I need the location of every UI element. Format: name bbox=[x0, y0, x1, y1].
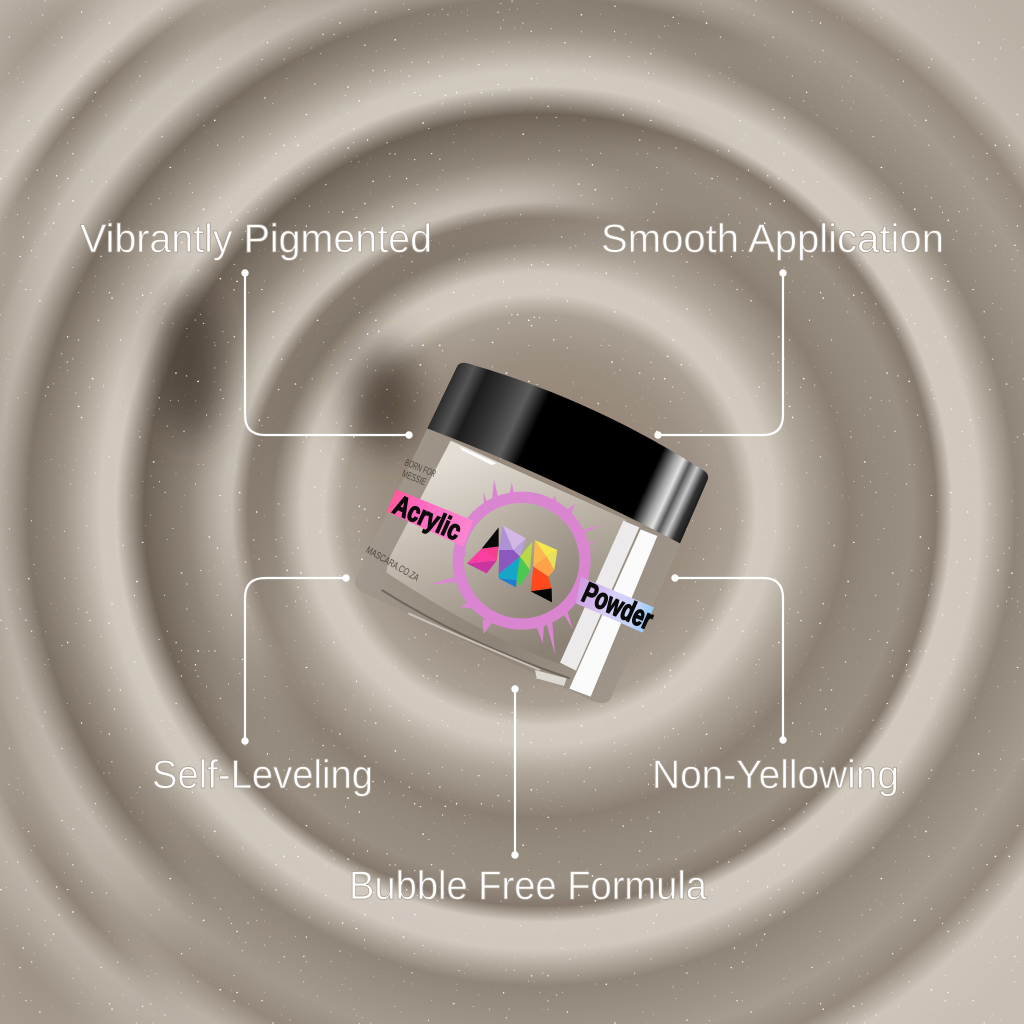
black lid bbox=[427, 363, 708, 543]
callout line: Non-Yellowing bbox=[672, 575, 786, 743]
callout line: Self-Leveling bbox=[242, 575, 349, 744]
callout line: Vibrantly Pigmented bbox=[242, 270, 412, 438]
label: Self-Leveling: Self-Leveling bbox=[152, 753, 373, 797]
Acrylic label band: Acrylic bbox=[389, 489, 466, 546]
Powder label band bbox=[576, 576, 658, 636]
small jar text: MASCARA.CO.ZA bbox=[364, 545, 421, 584]
small jar text bbox=[364, 458, 437, 584]
label: Non-Yellowing: Non-Yellowing bbox=[652, 753, 899, 797]
label: Vibrantly Pigmented: Vibrantly Pigmented bbox=[80, 217, 432, 261]
callout line: Bubble Free Formula bbox=[512, 686, 518, 858]
white glass reflections bbox=[460, 447, 657, 697]
label: Smooth Application: Smooth Application bbox=[601, 217, 944, 261]
label: Bubble Free Formula: Bubble Free Formula bbox=[349, 864, 708, 908]
powder inside jar bbox=[387, 441, 627, 665]
lower glass rim lines bbox=[382, 590, 570, 678]
Powder label band: Powder bbox=[577, 576, 658, 636]
small jar text: BORN FOR bbox=[403, 458, 437, 480]
callout line: Smooth Application bbox=[655, 270, 786, 438]
splatter logo ring bbox=[427, 479, 604, 655]
product jar bbox=[355, 363, 708, 703]
glass body bbox=[355, 428, 681, 703]
multicolour logo mark bbox=[467, 525, 557, 602]
small jar text: MESSIE bbox=[400, 469, 428, 488]
